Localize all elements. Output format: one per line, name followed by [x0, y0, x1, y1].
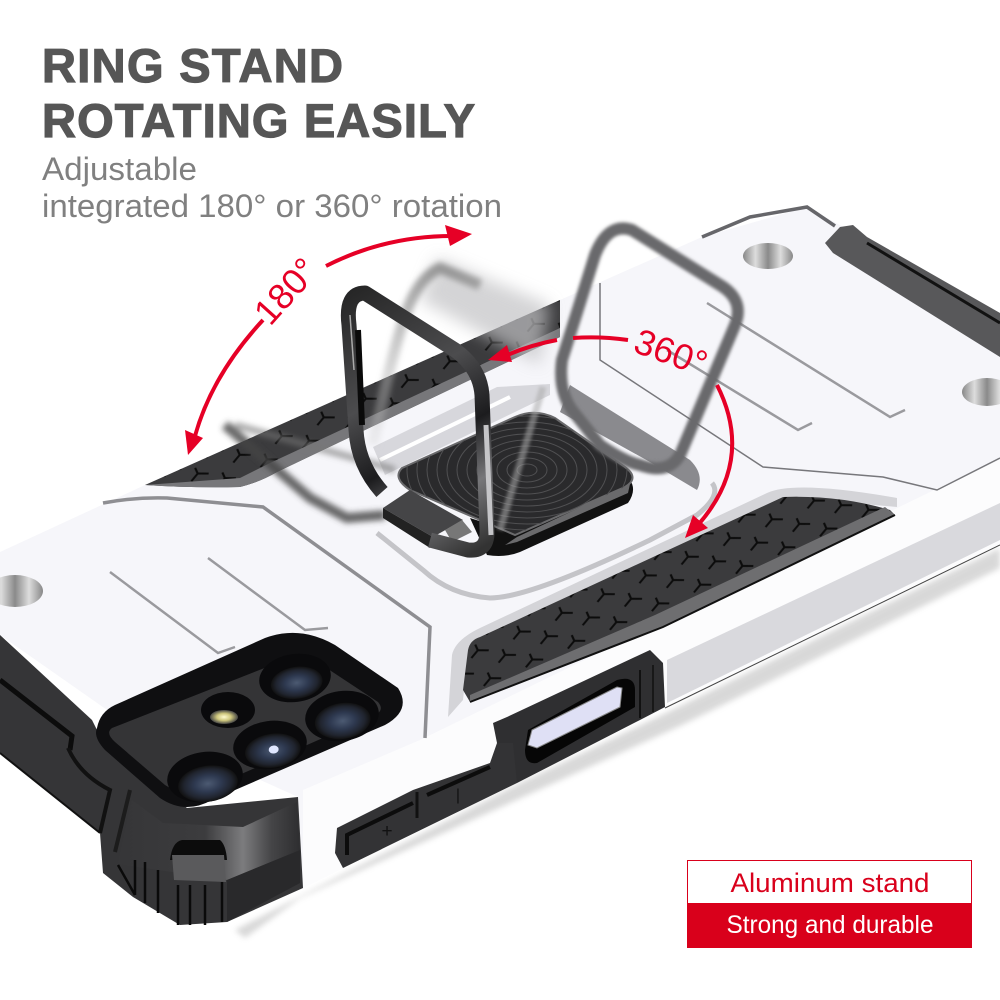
motion-blurred ring rear leg [373, 268, 480, 445]
ring base disc [398, 387, 647, 556]
screw disc right [962, 378, 1000, 406]
pale streak across disc [500, 387, 543, 530]
label: 360 degrees: 360° [629, 320, 713, 384]
port bracket [493, 650, 665, 783]
arrow: 360 degree rotation [488, 337, 732, 538]
top edge line [702, 207, 835, 237]
title: RING STAND [42, 39, 343, 92]
back slots left [110, 558, 328, 653]
lens centre [230, 716, 310, 774]
subtitle [42, 151, 502, 224]
phone case body [0, 207, 1000, 888]
camera module [96, 633, 403, 807]
title [42, 39, 475, 147]
flash [201, 692, 255, 728]
grey side band shading [667, 503, 1000, 703]
white side band [303, 458, 1000, 888]
subtitle: Adjustable [42, 151, 197, 187]
subtitle: integrated 180° or 360° rotation [42, 188, 502, 224]
motion-blurred ring plate (rear) [420, 258, 550, 365]
back slots right [667, 303, 905, 430]
rubber grip bottom-right [448, 488, 897, 717]
phone drop shadow [235, 548, 1000, 938]
lens bottom [164, 747, 246, 807]
screw disc top [743, 243, 793, 269]
lens top [256, 649, 334, 707]
crease lines right [600, 283, 1000, 490]
side buttons: | [456, 787, 460, 804]
arrow: 180 degree rotation [185, 225, 472, 455]
lens right [302, 686, 382, 746]
ring recess outline [377, 483, 715, 598]
right bumper [825, 225, 1000, 357]
metal ring front [348, 293, 491, 550]
black corner bumper [0, 635, 303, 925]
grey recess shadow [560, 385, 700, 490]
ridge line left [103, 498, 430, 738]
ring hinge [383, 490, 472, 548]
callout: aluminum stand: Aluminum stand [730, 868, 930, 898]
motion-blurred ring: right [561, 228, 738, 468]
corner ribs [118, 860, 222, 925]
screw disc left [0, 575, 43, 607]
side buttons: + [381, 821, 393, 842]
corner face [118, 800, 300, 880]
side buttons [335, 743, 517, 868]
silver stripes around ring [373, 384, 550, 475]
rubber grip top-left [145, 300, 560, 487]
motion-blurred ring: flat left [225, 425, 395, 518]
label: 180 degrees: 180° [246, 250, 326, 332]
corner notch [170, 840, 227, 860]
callout: aluminum stand: Strong and durable [726, 911, 934, 939]
callout: aluminum stand [687, 860, 972, 948]
title: ROTATING EASILY [42, 94, 475, 147]
